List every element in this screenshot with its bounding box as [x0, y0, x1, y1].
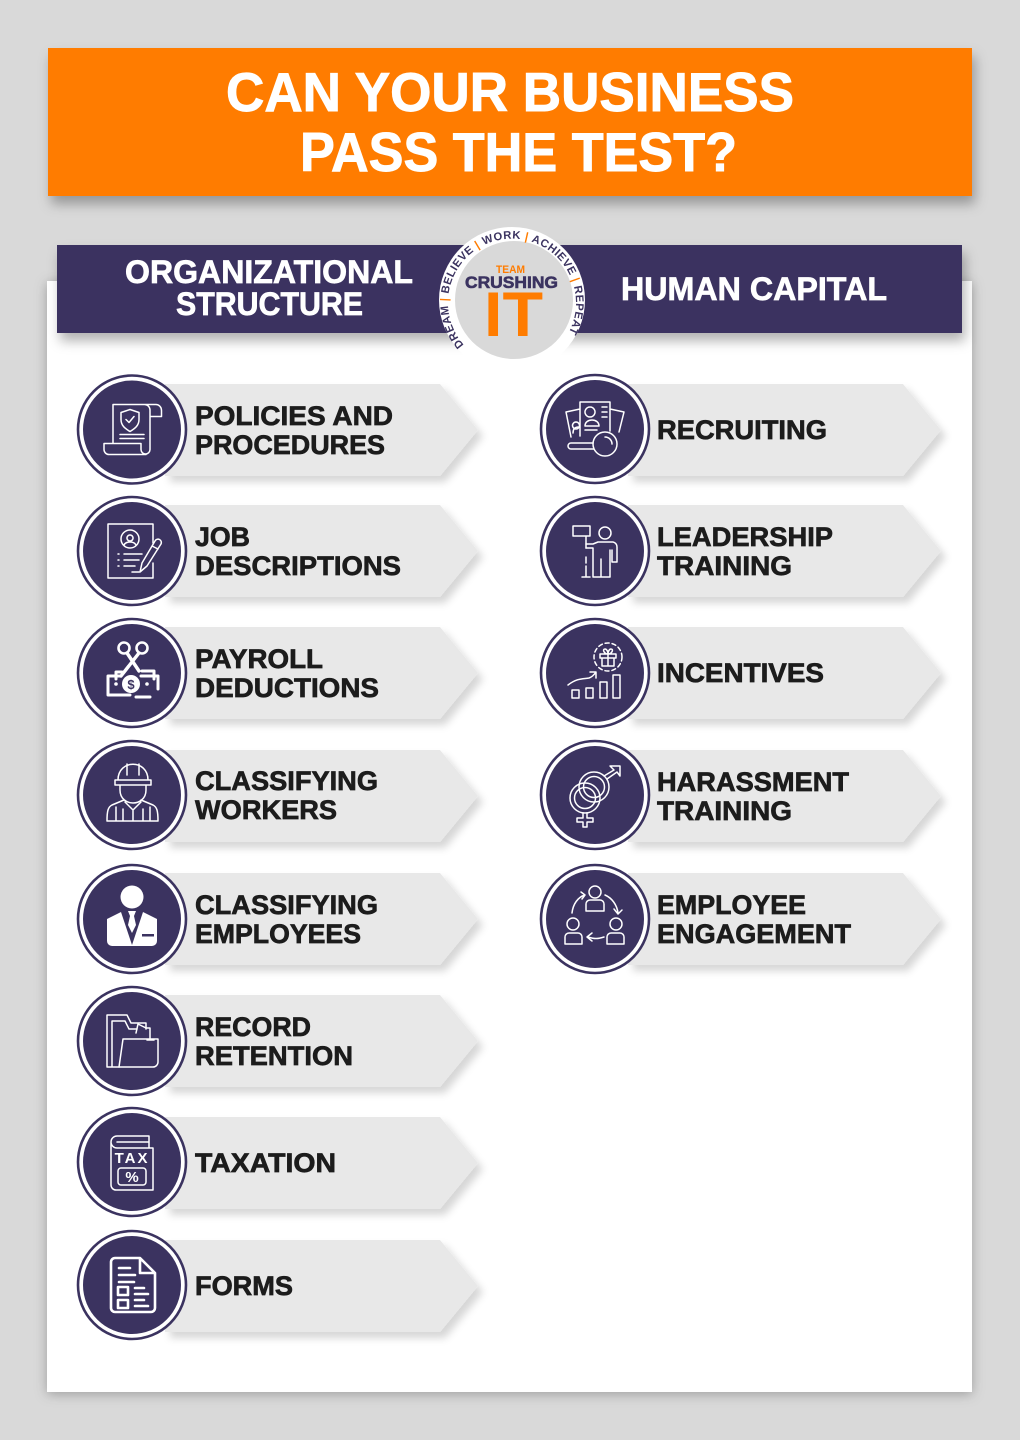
arrow: [628, 750, 941, 842]
title banner: [48, 48, 972, 196]
row: leadership training: [541, 497, 941, 605]
label: [195, 766, 378, 825]
label: PROCEDURES: [195, 430, 385, 460]
arrow: [628, 873, 941, 965]
label: [195, 890, 378, 949]
arrow: [165, 750, 478, 842]
heading: organizational structure: [125, 254, 413, 322]
icon: policy scroll with shield: [78, 376, 186, 484]
row: payroll deductions: [78, 619, 478, 727]
label: POLICIES AND: [195, 401, 393, 431]
heading: organizational structure: ORGANIZATIONAL: [125, 254, 413, 290]
icon: folders: [78, 987, 186, 1095]
label: LEADERSHIP: [657, 522, 833, 552]
icon: gift and rising bars: [541, 619, 649, 727]
heading: organizational structure: STRUCTURE: [176, 286, 363, 322]
arrow: [165, 1240, 478, 1332]
label: [195, 401, 393, 460]
title banner: CAN YOUR BUSINESS: [226, 61, 794, 123]
label: RECORD: [195, 1012, 311, 1042]
row: employee engagement: [541, 865, 941, 973]
label: HARASSMENT: [657, 767, 849, 797]
arrow: [628, 505, 941, 597]
row: harassment training: [541, 741, 941, 849]
icon: worker with hard hat: [78, 741, 186, 849]
arrow: [165, 995, 478, 1087]
row: classifying workers: [78, 741, 478, 849]
label: [657, 767, 849, 826]
row: forms: [78, 1231, 478, 1339]
label: PAYROLL: [195, 644, 323, 674]
icon: scissors cutting money: [78, 619, 186, 727]
arrow: [165, 505, 478, 597]
icon: resume and pencil: [78, 497, 186, 605]
arrow: [165, 384, 478, 476]
row: recruiting: [541, 375, 941, 483]
label: DESCRIPTIONS: [195, 551, 401, 581]
row: incentives: [541, 619, 941, 727]
logo: team crushing it: TEAM: [496, 264, 525, 276]
arrow: [628, 384, 941, 476]
label: [195, 644, 379, 703]
arrow: [165, 1117, 478, 1209]
row: taxation: [78, 1108, 478, 1216]
icon: tax book: %: [125, 1169, 139, 1186]
label: [195, 1012, 353, 1071]
icon: team engagement cycle: [541, 865, 649, 973]
label: FORMS: [195, 1271, 293, 1301]
label: RECRUITING: [657, 415, 827, 445]
label: TRAINING: [657, 796, 792, 826]
icon: leader with flag: [541, 497, 649, 605]
label: CLASSIFYING: [195, 890, 378, 920]
label: DEDUCTIONS: [195, 673, 379, 703]
column header band: [57, 245, 962, 333]
icon: scissors cutting money: $: [127, 677, 135, 692]
logo: team crushing it: CRUSHING: [465, 273, 558, 292]
label: EMPLOYEES: [195, 919, 361, 949]
logo: team crushing it: IT: [484, 280, 543, 350]
icon: tax book: [78, 1108, 186, 1216]
white content panel: [47, 281, 972, 1392]
label: [195, 522, 401, 581]
arrow: [165, 627, 478, 719]
label: ENGAGEMENT: [657, 919, 852, 949]
title banner: PASS THE TEST?: [300, 121, 737, 183]
label: TAXATION: [195, 1148, 336, 1178]
row: classifying employees: [78, 865, 478, 973]
icon: form document: [78, 1231, 186, 1339]
arrow: [165, 873, 478, 965]
label: EMPLOYEE: [657, 890, 806, 920]
icon: tax book: TAX: [115, 1150, 149, 1167]
icon: gender symbols: [541, 741, 649, 849]
label: [657, 890, 852, 949]
row: record retention: [78, 987, 478, 1095]
label: TRAINING: [657, 551, 792, 581]
row: job descriptions: [78, 497, 478, 605]
row: policies and procedures: [78, 376, 478, 484]
label: JOB: [195, 522, 250, 552]
arrow: [628, 627, 941, 719]
label: INCENTIVES: [657, 658, 824, 688]
logo: team crushing it: DREAM | BELIEVE | WORK | ACHIEVE | REPEAT: [440, 230, 584, 350]
heading: human capital: HUMAN CAPITAL: [621, 271, 887, 307]
label: CLASSIFYING: [195, 766, 378, 796]
icon: business person: [78, 865, 186, 973]
label: [657, 522, 833, 581]
label: WORKERS: [195, 795, 337, 825]
label: RETENTION: [195, 1041, 353, 1071]
icon: resumes and magnifier: [541, 375, 649, 483]
